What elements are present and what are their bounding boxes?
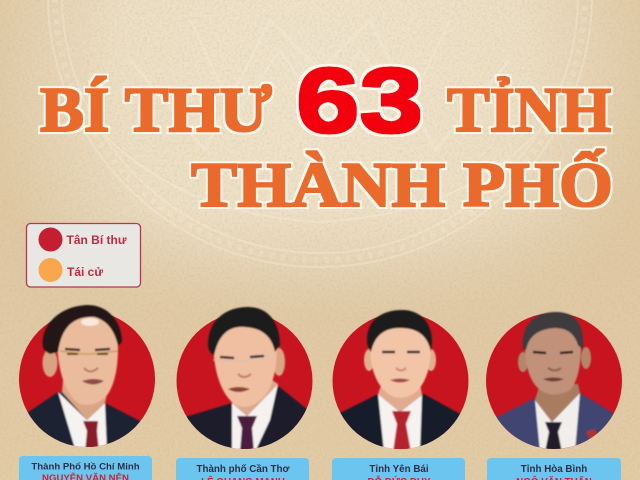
portrait: Lê Quang Mạnh <box>176 306 312 449</box>
portrait: Đỗ Đức Duy <box>332 309 468 449</box>
card: Thành phố Cần Thơ: Thành phố Cần Thơ <box>197 464 290 475</box>
title <box>40 50 613 220</box>
card: Tỉnh Hòa Bình <box>487 458 621 480</box>
card: Tỉnh Hòa Bình: Tỉnh Hòa Bình <box>521 464 587 475</box>
legend item: new secretary: Tân Bí thư <box>66 233 127 247</box>
title line 1: BÍ THƯ: BÍ THƯ <box>40 75 272 145</box>
legend item: re-elected: Tái cử <box>67 265 103 279</box>
card: Tỉnh Yên Bái: Tỉnh Yên Bái <box>369 464 429 475</box>
card: Thành phố Hồ Chí Minh <box>19 456 152 480</box>
card: Thành phố Cần Thơ <box>176 458 309 480</box>
title line 2: THÀNH PHỐ: THÀNH PHỐ <box>191 149 613 220</box>
title number: 63: 63 <box>296 50 423 152</box>
faint national emblem watermark <box>48 0 592 267</box>
title line 1: TỈNH: TỈNH <box>447 75 611 145</box>
portrait: Ngô Văn Tuấn <box>486 311 622 449</box>
card: Tỉnh Yên Bái <box>332 458 465 480</box>
legend <box>26 224 140 287</box>
portrait: Nguyễn Văn Nên <box>19 304 155 447</box>
card: Thành phố Hồ Chí Minh: Thành Phố Hồ Chí Minh <box>31 462 140 472</box>
